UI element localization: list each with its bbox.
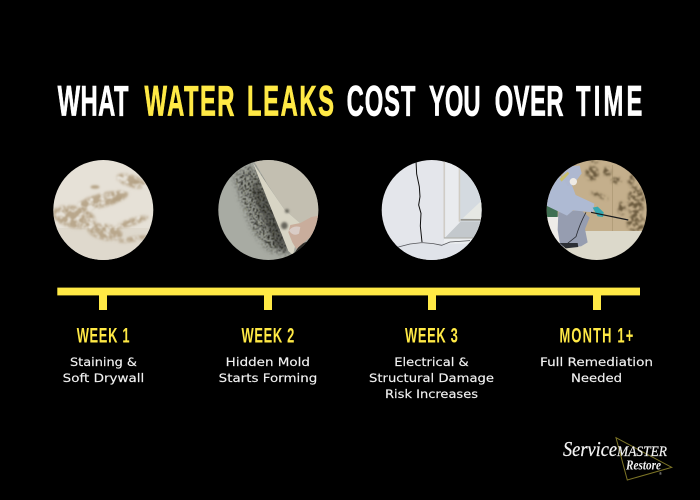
peeled underside: [253, 163, 300, 255]
spray wand: [591, 212, 628, 220]
step: week 3: [369, 323, 494, 401]
floor: [552, 231, 642, 260]
title: TIME: [576, 79, 642, 125]
step: week 2: Hidden Mold: [226, 355, 310, 369]
step: week 2: WEEK 2: [242, 323, 294, 347]
step: week 3: Structural Damage: [369, 371, 494, 385]
torso and arm: [546, 176, 594, 216]
step: week 1: Soft Drywall: [63, 371, 144, 385]
legs: [558, 210, 590, 246]
cracks: [416, 161, 422, 242]
photo: mold behind peeling wall: [218, 160, 318, 260]
straps: [546, 206, 558, 217]
photo: remediation worker spraying mold: [546, 160, 647, 260]
window frame: [443, 160, 482, 240]
tick: week 3: [428, 295, 436, 310]
logo: ServiceMASTER Restore: [563, 437, 672, 480]
step: month 1+: MONTH 1+: [560, 323, 633, 347]
head: [562, 166, 582, 184]
logo: ServiceMASTER Restore: ®: [659, 471, 662, 476]
logo: ServiceMASTER Restore: MASTER: [616, 444, 667, 460]
step: week 2: Starts Forming: [219, 371, 317, 385]
tick: month 1+: [593, 295, 601, 310]
step: week 1: WEEK 1: [77, 323, 130, 347]
title: COST: [347, 79, 415, 125]
photo: ceiling water staining: [50, 160, 154, 261]
step: week 1: [63, 323, 144, 385]
photo: cracked wall near window: [382, 160, 482, 260]
logo: ServiceMASTER Restore: Service: [563, 437, 617, 461]
step: week 2: [219, 323, 317, 385]
glove: [593, 207, 604, 217]
wall behind peel: [254, 160, 318, 223]
step: month 1+: [540, 323, 653, 385]
step: week 3: Risk Increases: [385, 387, 478, 401]
hand: [288, 216, 318, 249]
title: OVER: [495, 79, 564, 125]
logo: ServiceMASTER Restore: Restore: [625, 458, 661, 472]
step: week 1: Staining &: [70, 355, 137, 369]
step: month 1+: Full Remediation: [540, 355, 653, 369]
tank: [547, 216, 560, 243]
title: LEAKS: [247, 79, 334, 125]
title: WHAT: [58, 79, 129, 125]
dark corner under hand: [294, 242, 307, 252]
tick: week 2: [264, 295, 272, 310]
step: week 3: Electrical &: [394, 355, 469, 369]
tick: week 1: [99, 295, 107, 310]
step: month 1+: Needed: [571, 371, 622, 385]
title: YOU: [429, 79, 481, 125]
timeline bar: [57, 288, 640, 310]
title: WATER: [144, 79, 235, 125]
step: week 3: WEEK 3: [405, 323, 458, 347]
title: [58, 79, 642, 125]
